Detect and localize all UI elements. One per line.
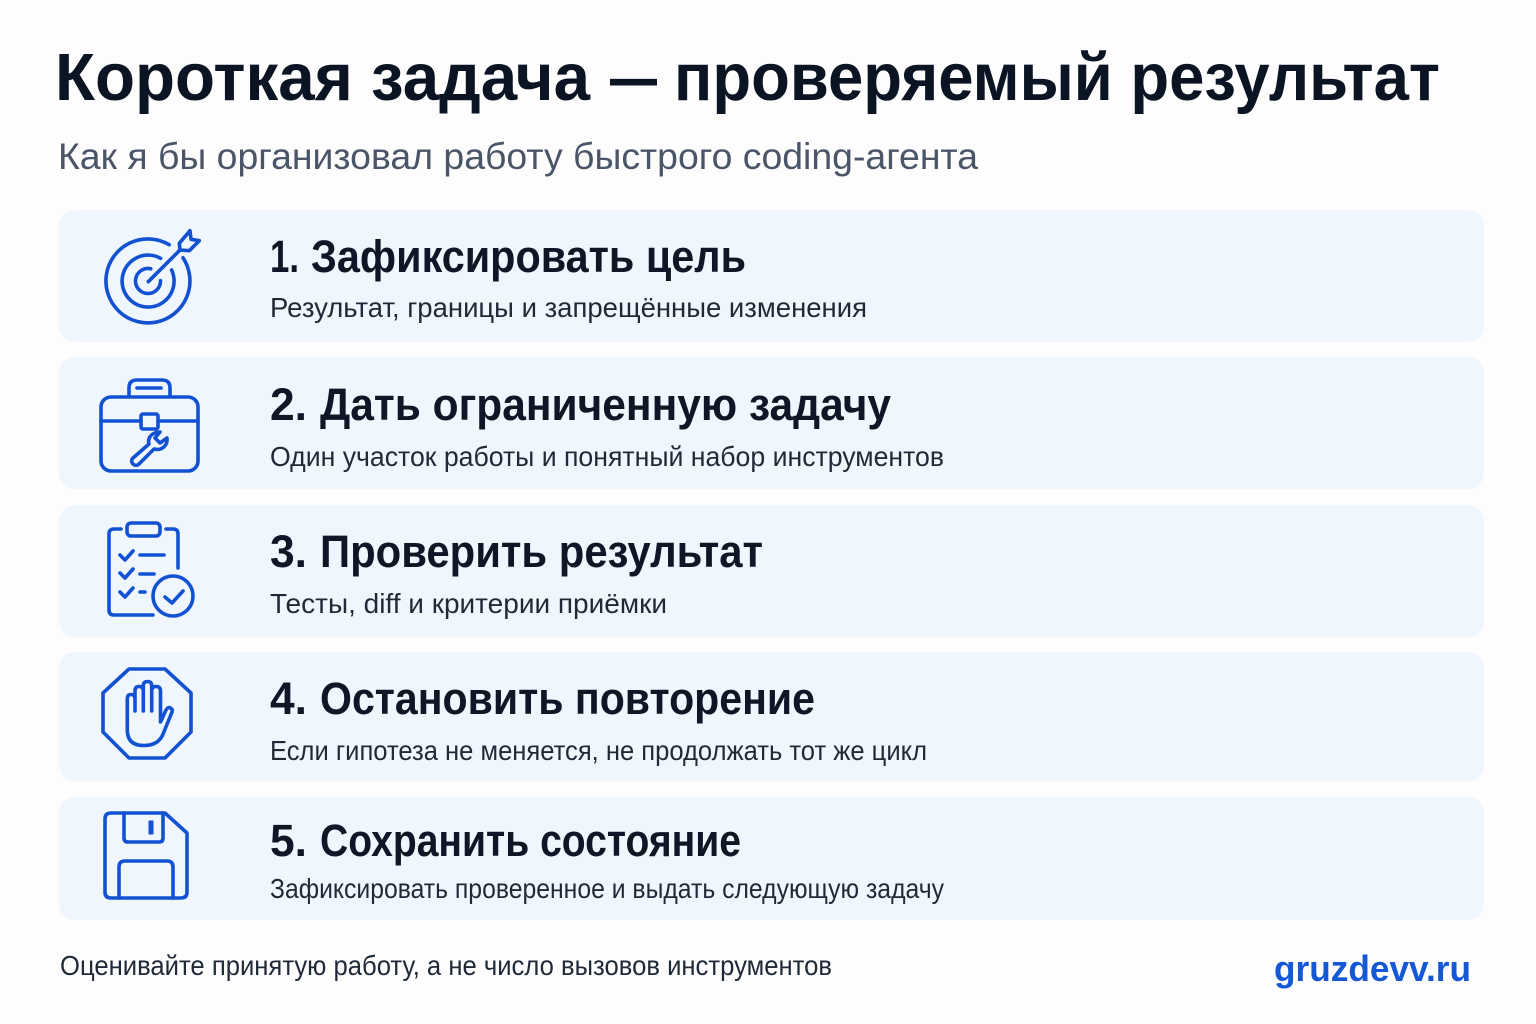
panel: step 4 [59,652,1484,781]
title [55,40,1440,115]
icon: floppy disk [105,813,187,898]
title: проверяемый результат [674,40,1440,115]
step 2 description: Один участок работы и понятный набор инструментов [270,441,944,472]
step 4 heading: Остановить повторение [320,673,815,724]
step 5 heading: 5. [270,815,307,866]
step 5 description: Зафиксировать проверенное и выдать следующую задачу [270,873,944,904]
panel: step 1 [59,210,1484,342]
step 1 description: Результат, границы и запрещённые изменения [270,292,867,323]
step 3 heading: Проверить результат [320,526,763,577]
step 3 description: Тесты, diff и критерии приёмки [270,588,667,619]
panel: step 5 [59,797,1484,920]
step 2 heading: Дать ограниченную задачу [320,379,891,430]
step 5 heading: Сохранить состояние [320,815,741,866]
step 1 heading: 1. [270,231,299,282]
title: Короткая задача [55,40,591,115]
subtitle: Как я бы организовал работу быстрого coding-агента [58,136,978,177]
brand link: gruzdevv.ru [1274,948,1471,989]
icon: stop sign with hand [103,669,191,758]
panel: step 3 [59,505,1484,637]
step 4 description: Если гипотеза не меняется, не продолжать тот же цикл [270,735,927,766]
icon: toolbox with wrench [101,380,198,471]
icon: target with arrow [106,231,199,323]
panel: step 2 [59,357,1484,489]
footer note: Оценивайте принятую работу, а не число вызовов инструментов [60,950,832,981]
step 2 heading: 2. [270,379,307,430]
step 4 heading: 4. [270,673,307,724]
step 1 heading: Зафиксировать цель [311,231,746,282]
icon: checklist clipboard [109,523,193,616]
title: — [610,40,657,115]
step 3 heading: 3. [270,526,307,577]
